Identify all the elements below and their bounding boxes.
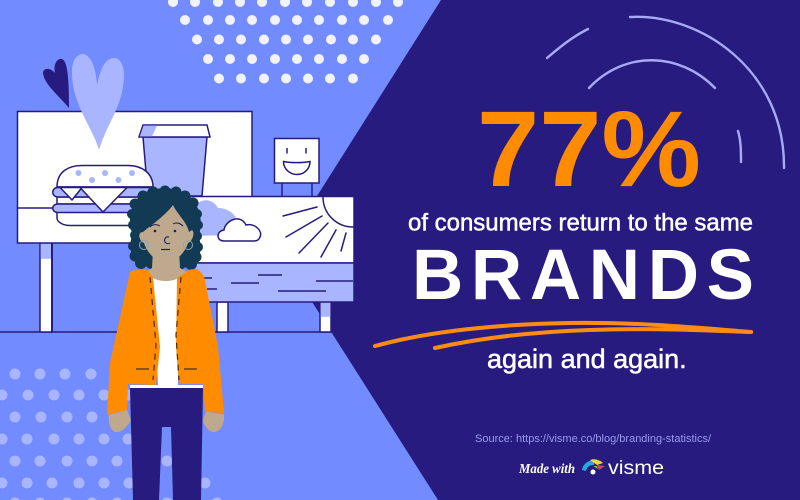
brands heading: BRANDS <box>412 236 754 315</box>
jacket stitching and pockets <box>136 277 197 380</box>
icon: visme mark <box>582 459 605 474</box>
billboard: weather scene <box>190 196 354 332</box>
facial features <box>150 223 183 250</box>
made with visme logo <box>518 458 664 479</box>
white shirt <box>130 278 203 388</box>
ground line <box>0 331 332 333</box>
made with visme logo: visme <box>608 458 664 479</box>
neck <box>143 250 191 282</box>
subheading: of consumers return to the same <box>408 210 753 236</box>
face <box>139 205 193 263</box>
figure: woman <box>107 186 224 500</box>
hair <box>127 186 203 270</box>
closing text: again and again. <box>487 344 687 374</box>
sky panel <box>190 196 354 263</box>
water lines <box>203 275 353 291</box>
trousers <box>130 388 203 500</box>
icon: light cloud <box>190 200 236 236</box>
billboard: food <box>17 112 252 332</box>
orange swoosh underline <box>375 323 751 348</box>
icon: light heart <box>72 54 124 150</box>
billboard post <box>40 243 52 332</box>
jacket <box>107 269 224 415</box>
icon: drink cup <box>139 125 210 196</box>
decorative arcs <box>547 17 784 168</box>
panel: dark background <box>281 0 800 500</box>
headline statistic: 77% <box>477 88 701 209</box>
water panel <box>190 263 354 302</box>
made with visme logo: Made with <box>518 462 575 477</box>
earrings <box>140 240 192 250</box>
source: Source: https://visme.co/blog/branding-statistics/ <box>475 433 712 445</box>
icon: smiley sign <box>274 138 319 197</box>
icon: burger <box>53 166 155 226</box>
billboard face <box>18 112 252 243</box>
icon: outlined cloud <box>218 219 261 241</box>
icon: sun <box>283 198 354 257</box>
hands <box>109 410 224 432</box>
top dot pattern <box>168 0 403 84</box>
icon: dark heart <box>43 59 69 108</box>
billboard posts <box>217 302 331 332</box>
bottom dot pattern <box>0 368 222 500</box>
